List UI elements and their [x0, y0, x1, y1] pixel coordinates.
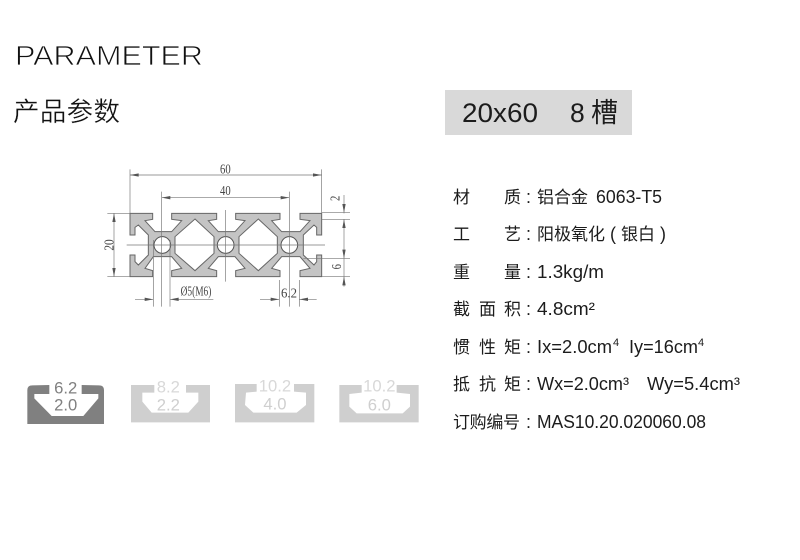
dimension labels: Ø5(M6) — [181, 283, 211, 298]
tag: 20x60 8 槽: 槽 — [591, 91, 618, 130]
spec: section area: 4.8cm² — [537, 299, 595, 319]
slot icon: 10.2 / 4.0: 4.0 — [263, 394, 287, 413]
spec: moment of inertia: 性 — [479, 333, 496, 358]
spec: moment of inertia: : — [526, 337, 531, 357]
slot icon: 10.2 / 6.0: 6.0 — [368, 396, 391, 415]
spec: material: 6063-T5 — [596, 187, 662, 207]
spec: process: ) — [660, 224, 666, 244]
dimension labels: 40 — [220, 183, 231, 198]
spec: moment of inertia: 惯 — [453, 333, 470, 358]
spec: moment of inertia — [453, 333, 704, 358]
spec: section area: 面 — [479, 295, 496, 320]
slot icon: 8.2 / 2.2: 2.2 — [157, 396, 180, 415]
dimension labels: 6 — [329, 264, 344, 269]
spec: material: 铝合金 — [537, 183, 588, 208]
spec: section modulus: : — [526, 374, 531, 394]
spec: section modulus: 抗 — [479, 370, 496, 395]
spec: moment of inertia: 4 — [613, 337, 619, 349]
dimension labels: 6.2 — [281, 285, 297, 300]
tag: 20x60 8 槽: 20x60 — [462, 98, 538, 128]
spec: process — [453, 220, 666, 245]
spec: weight: 量 — [504, 258, 521, 283]
heading: 产品参数: 产品参数 — [13, 90, 120, 129]
spec: material: 质 — [504, 183, 521, 208]
spec: process: : — [526, 224, 531, 244]
slot icon: 10.2 / 6.0 — [339, 376, 419, 422]
spec: weight: 重 — [453, 258, 470, 283]
spec: order number — [453, 408, 706, 433]
spec: section modulus: Wx=2.0cm³ — [537, 374, 629, 394]
tag: 20x60 8 槽: 8 — [570, 98, 585, 128]
dimension labels — [101, 161, 344, 300]
spec: process: 阳极氧化 — [537, 220, 605, 245]
slot icon: 6.2 / 2.0: 6.2 — [54, 378, 77, 397]
spec: section area — [453, 295, 595, 320]
spec: material: 材 — [453, 183, 470, 208]
spec: moment of inertia: Iy=16cm — [629, 337, 698, 357]
spec: order number: 订购编号 — [453, 408, 520, 433]
tag: 20x60 8 槽 — [445, 90, 632, 135]
slot icon: 10.2 / 4.0: 10.2 — [259, 376, 291, 395]
slot icon: 10.2 / 4.0 — [235, 376, 314, 422]
spec: weight: 1.3kg/m — [537, 262, 604, 282]
dimension arrows — [112, 173, 346, 301]
dimension labels: 20 — [101, 239, 116, 251]
spec: moment of inertia: Ix=2.0cm — [537, 337, 612, 357]
slot icon: 6.2 / 2.0 — [27, 378, 104, 424]
spec: order number: MAS10.20.020060.08 — [537, 412, 706, 432]
technical drawing: 20x60 profile cross-section — [101, 161, 350, 307]
spec: order number: : — [526, 412, 531, 432]
spec: section area: : — [526, 299, 531, 319]
spec: section area: 截 — [453, 295, 470, 320]
title: PARAMETER: PARAMETER — [15, 40, 203, 71]
spec: material: : — [526, 187, 531, 207]
slot icon: 6.2 / 2.0: 2.0 — [54, 396, 77, 415]
spec: section modulus: Wy=5.4cm³ — [647, 374, 740, 394]
spec: weight: : — [526, 262, 531, 282]
spec: process: 工 — [453, 220, 470, 245]
spec: section modulus — [453, 370, 740, 395]
spec: weight — [453, 258, 604, 283]
slot icon: 10.2 / 6.0: 10.2 — [363, 376, 396, 395]
spec: process: 银白 — [621, 220, 655, 245]
dimension labels: 2 — [327, 196, 342, 201]
dimension lines — [107, 169, 350, 307]
spec: process: ( — [610, 224, 616, 244]
spec: section modulus: 抵 — [453, 370, 470, 395]
spec: moment of inertia: 4 — [698, 337, 704, 349]
profile body — [130, 213, 322, 277]
slot icon: 8.2 / 2.2: 8.2 — [157, 378, 180, 397]
spec: process: 艺 — [504, 220, 521, 245]
spec: moment of inertia: 矩 — [504, 333, 521, 358]
spec: section area: 积 — [504, 295, 521, 320]
dimension labels: 60 — [220, 161, 231, 176]
spec: material — [453, 183, 662, 208]
spec: section modulus: 矩 — [504, 370, 521, 395]
slot icon: 8.2 / 2.2 — [131, 378, 210, 422]
spec list — [453, 183, 740, 433]
